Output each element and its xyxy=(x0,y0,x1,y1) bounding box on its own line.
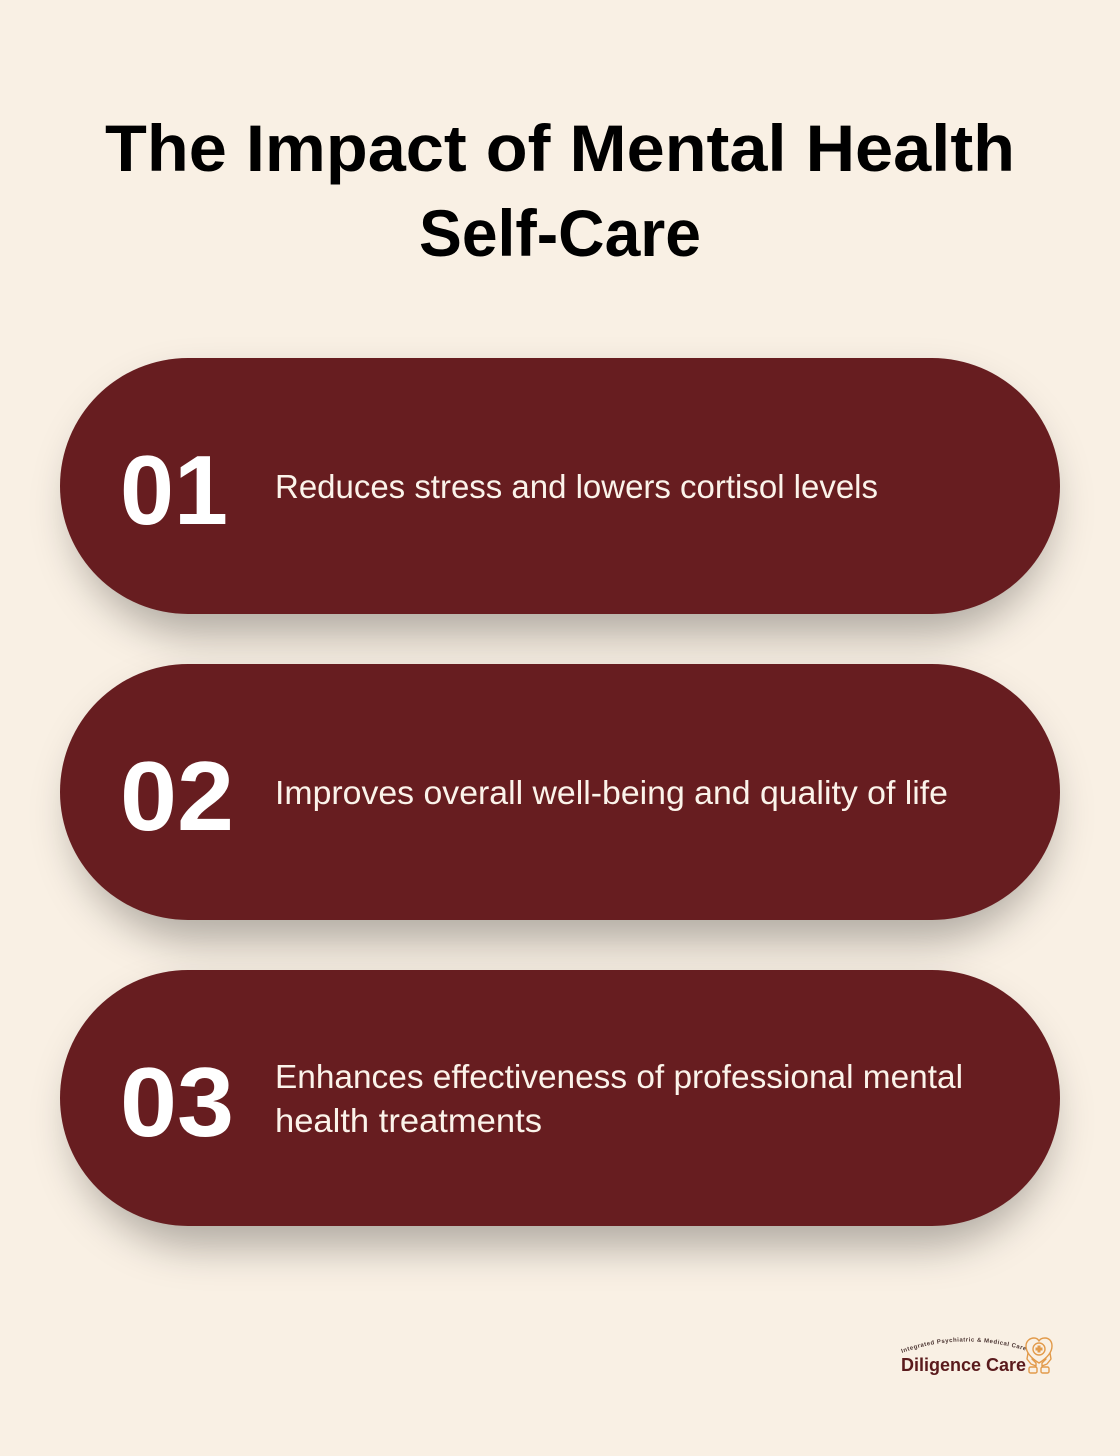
text: item 03 xyxy=(275,1058,963,1139)
title: The Impact of Mental Health xyxy=(105,111,1015,185)
text: item 02: Improves overall well-being and quality of life xyxy=(275,774,948,811)
panel: item 02 xyxy=(60,664,1060,942)
number 03: 03 xyxy=(120,1047,234,1157)
logo name: Diligence Care xyxy=(901,1355,1026,1375)
title xyxy=(105,111,1015,270)
number 02: 02 xyxy=(120,741,234,851)
logo tagline: Integrated Psychiatric & Medical Care xyxy=(901,1337,1026,1353)
panel: item 01 xyxy=(60,358,1060,636)
text: item 01: Reduces stress and lowers cortisol levels xyxy=(275,468,878,505)
text: item 03: Enhances effectiveness of professional mental xyxy=(275,1058,963,1095)
icon: heart in hands xyxy=(1026,1338,1052,1373)
text: item 03: health treatments xyxy=(275,1102,542,1139)
logo xyxy=(901,1337,1053,1375)
title: Self-Care xyxy=(419,196,701,270)
panel: item 03 xyxy=(60,970,1060,1248)
number 01: 01 xyxy=(120,435,228,545)
